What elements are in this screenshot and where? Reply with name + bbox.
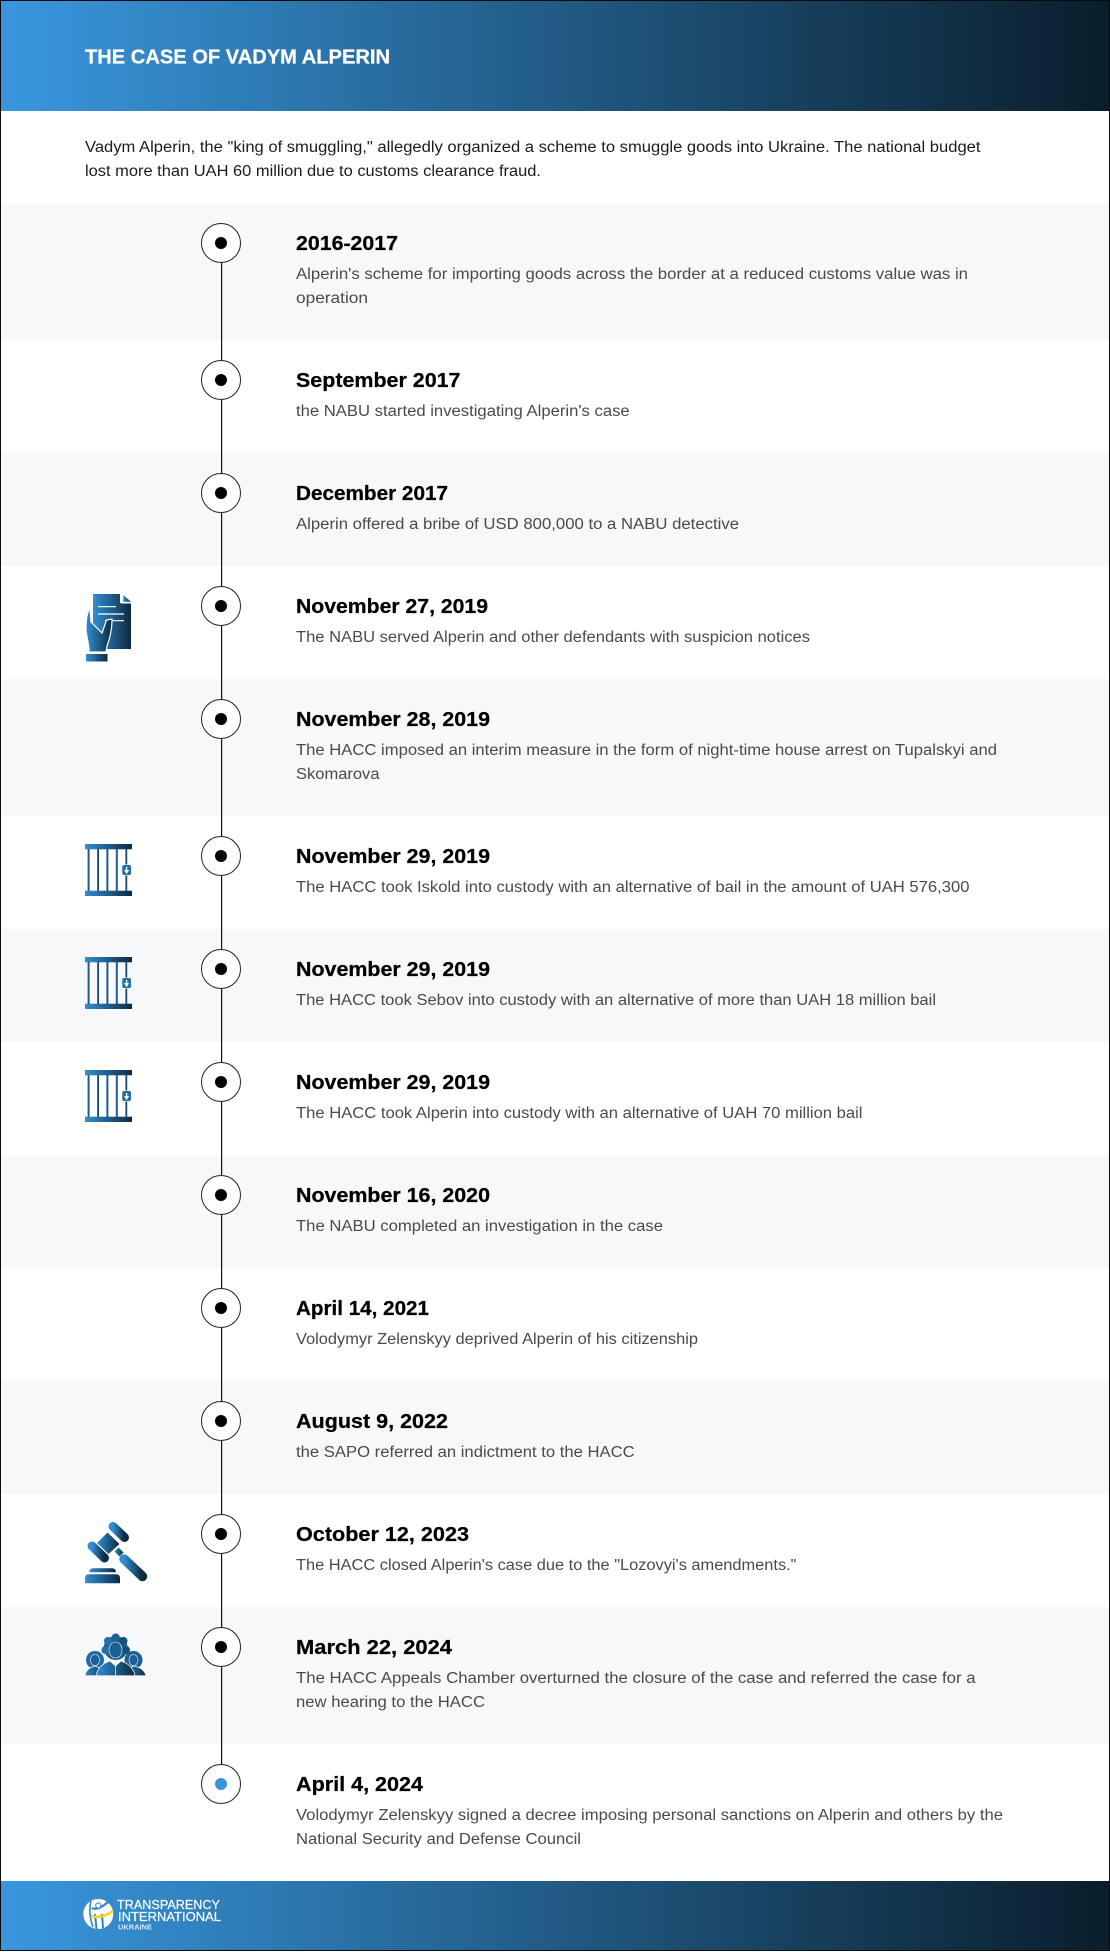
icon: hand holding document: [86, 594, 131, 662]
event: November 27, 2019: [86, 586, 810, 662]
event: November 28, 2019: [202, 700, 997, 783]
event: 2016-2017: 2016-2017: [296, 232, 398, 255]
icon: gavel: [85, 1526, 142, 1583]
event: March 22, 2024: new hearing to the HACC: [296, 1694, 485, 1711]
event: April 4, 2024: [202, 1764, 1003, 1848]
event: November 29, 2019 (Iskold): The HACC took Iskold into custody with an alternative of bail in the amount of UAH 576,300: [296, 879, 970, 896]
logo: Transparency International Ukraine: INTERNATIONAL: [118, 1909, 221, 1924]
intro text: lost more than UAH 60 million due to customs clearance fraud.: [85, 163, 541, 180]
event: April 4, 2024: April 4, 2024: [296, 1773, 424, 1796]
event: April 4, 2024: National Security and Defense Council: [296, 1831, 581, 1848]
event: August 9, 2022: the SAPO referred an indictment to the HACC: [296, 1444, 635, 1461]
event: October 12, 2023: [85, 1514, 796, 1583]
event: November 16, 2020: The NABU completed an investigation in the case: [296, 1218, 663, 1235]
event: November 29, 2019 (Alperin): November 29, 2019: [296, 1071, 490, 1094]
event: November 29, 2019 (Iskold): [85, 836, 970, 896]
background bands: [0, 203, 1110, 1744]
event: November 29, 2019 (Sebov): November 29, 2019: [296, 958, 490, 981]
timeline axis: [221, 243, 223, 1765]
event: November 29, 2019 (Sebov): [85, 950, 936, 1009]
intro text: Vadym Alperin, the "king of smuggling," allegedly organized a scheme to smuggle goods into Ukraine. The national budget: [85, 139, 981, 156]
logo: Transparency International Ukraine: [83, 1897, 221, 1932]
event: November 28, 2019: November 28, 2019: [296, 708, 490, 731]
logo: Transparency International Ukraine: TRANSPARENCY: [117, 1897, 220, 1912]
event: April 14, 2021: April 14, 2021: [296, 1297, 429, 1320]
header banner: [0, 0, 1110, 111]
event: November 29, 2019 (Iskold): November 29, 2019: [296, 845, 490, 868]
event: 2016-2017: [202, 224, 968, 307]
event: March 22, 2024: The HACC Appeals Chamber overturned the closure of the case and referred the case for a: [296, 1670, 976, 1687]
event: April 14, 2021: [202, 1288, 698, 1348]
event: November 27, 2019: November 27, 2019: [296, 595, 488, 618]
event: September 2017: September 2017: [296, 369, 460, 392]
event: August 9, 2022: August 9, 2022: [296, 1410, 448, 1433]
event: August 9, 2022: [202, 1402, 635, 1461]
event: November 29, 2019 (Alperin): [85, 1062, 862, 1122]
title: THE CASE OF VADYM ALPERIN: [85, 46, 390, 68]
event: April 14, 2021: Volodymyr Zelenskyy deprived Alperin of his citizenship: [296, 1331, 698, 1348]
event: September 2017: [202, 360, 630, 420]
icon: prison bars: [85, 844, 132, 896]
event: November 27, 2019: The NABU served Alperin and other defendants with suspicion notices: [296, 629, 810, 646]
event: November 16, 2020: [202, 1176, 663, 1235]
event: March 22, 2024: March 22, 2024: [296, 1636, 453, 1659]
event: 2016-2017: operation: [296, 290, 368, 307]
footer banner: [0, 1881, 1110, 1951]
icon: prison bars: [85, 1070, 132, 1122]
event: October 12, 2023: October 12, 2023: [296, 1523, 469, 1546]
event: October 12, 2023: The HACC closed Alperin's case due to the "Lozovyi's amendments.": [296, 1557, 796, 1574]
event: November 16, 2020: November 16, 2020: [296, 1184, 490, 1207]
icon: prison bars: [85, 957, 132, 1009]
event: September 2017: the NABU started investigating Alperin's case: [296, 403, 630, 420]
event: December 2017: December 2017: [296, 482, 448, 505]
icon: panel of judges: [85, 1634, 146, 1676]
event: December 2017: [202, 474, 739, 533]
event: November 28, 2019: The HACC imposed an interim measure in the form of night-time house arrest on Tupalskyi and: [296, 742, 997, 759]
intro text: [85, 139, 981, 180]
event: March 22, 2024: [85, 1628, 976, 1711]
logo: Transparency International Ukraine: UKRAINE: [118, 1924, 152, 1932]
event: November 28, 2019: Skomarova: [296, 766, 380, 783]
event: November 29, 2019 (Sebov): The HACC took Sebov into custody with an alternative of more than UAH 18 million bail: [296, 992, 936, 1009]
event: April 4, 2024: Volodymyr Zelenskyy signed a decree imposing personal sanctions on Alperin and others by the: [296, 1807, 1003, 1824]
event: December 2017: Alperin offered a bribe of USD 800,000 to a NABU detective: [296, 516, 739, 533]
event: 2016-2017: Alperin's scheme for importing goods across the border at a reduced customs value was in: [296, 266, 968, 283]
event: November 29, 2019 (Alperin): The HACC took Alperin into custody with an alternative of UAH 70 million bail: [296, 1105, 862, 1122]
